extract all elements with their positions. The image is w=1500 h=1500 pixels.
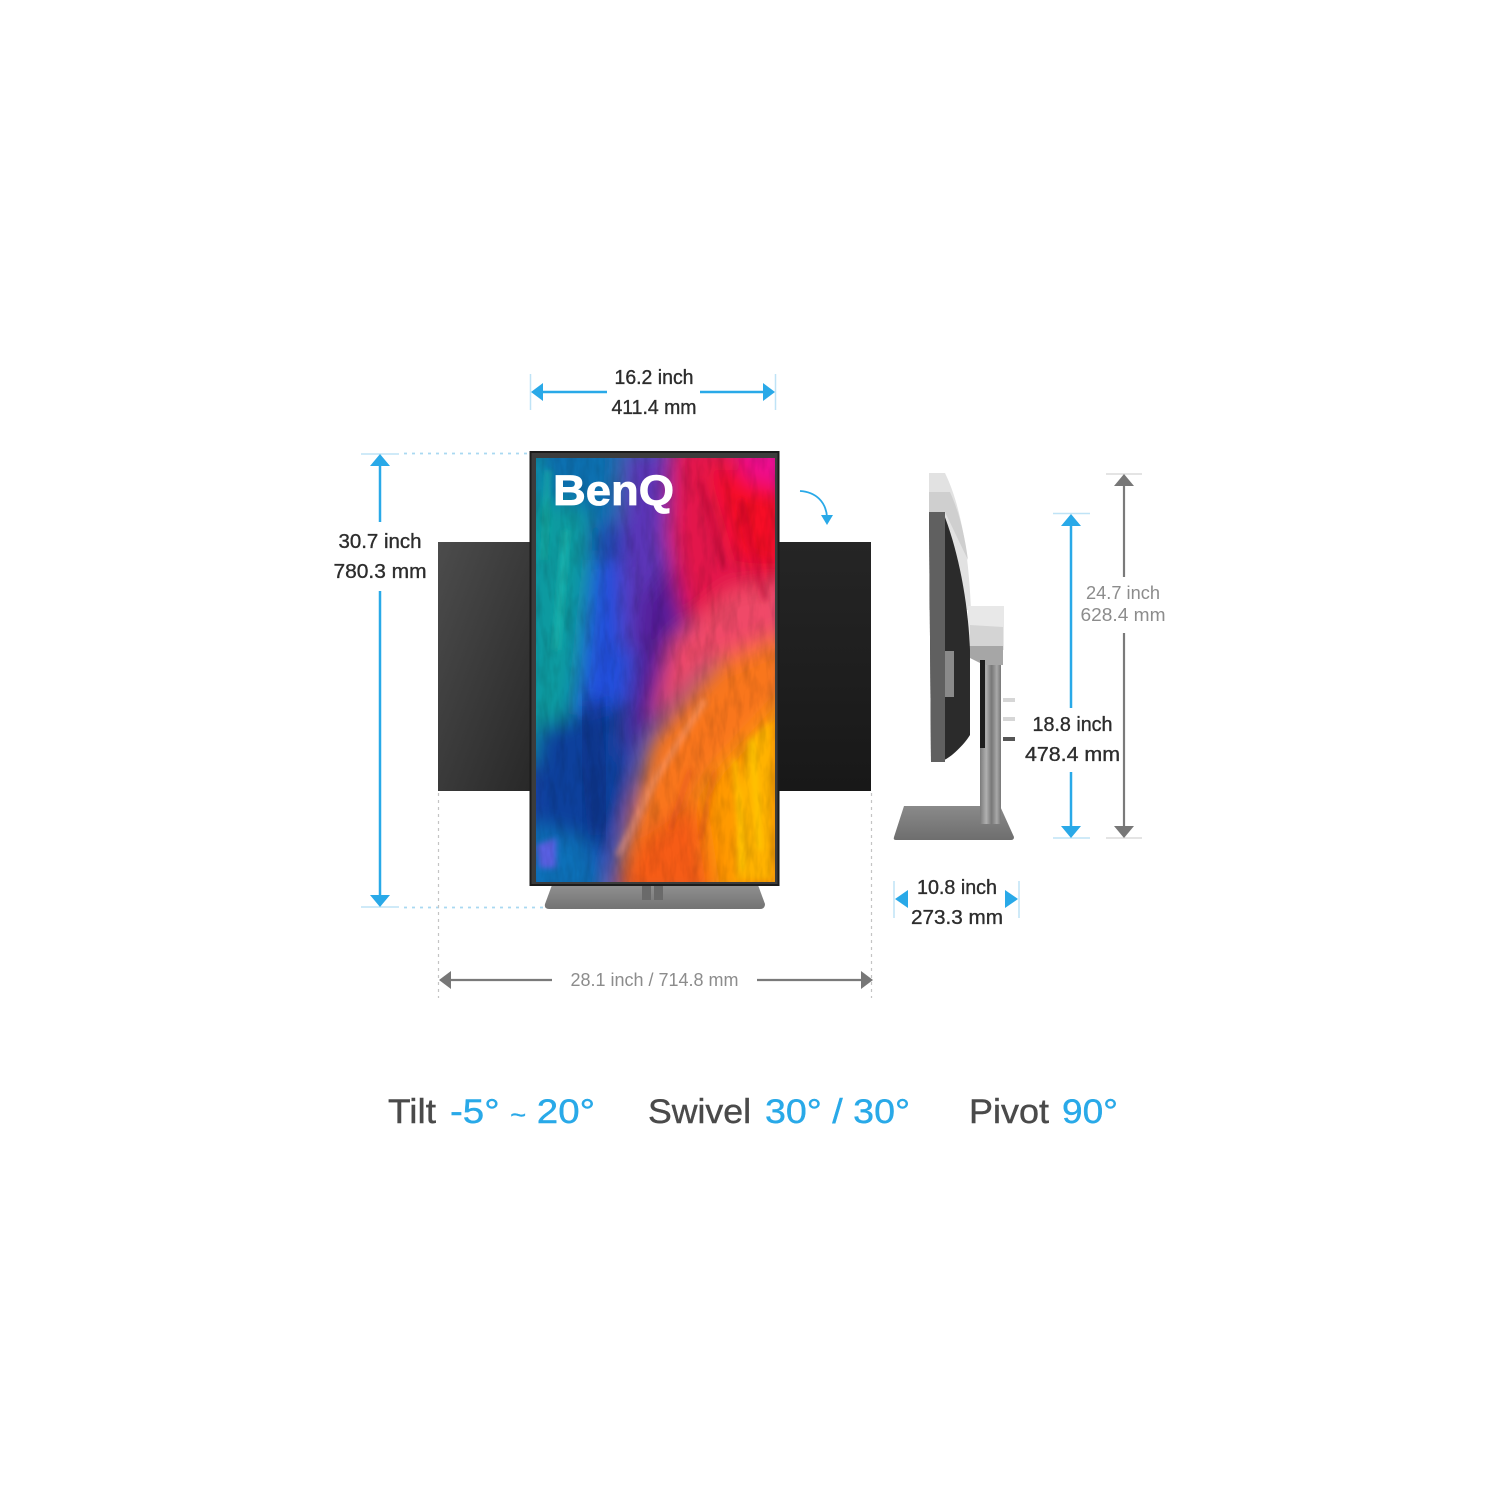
pivot spec: Pivot [969, 1093, 1050, 1131]
port block [945, 651, 954, 697]
dimension: maximum height 24.7 inch: 24.7 inch [1086, 583, 1160, 603]
height clips [1003, 698, 1015, 702]
swivel spec [648, 1093, 910, 1131]
monitor front view with rotated landscape panel behind [438, 440, 871, 909]
dimension: minimum height 18.8 inch: 18.8 inch [1032, 714, 1112, 736]
dimension: maximum height 24.7 inch: 628.4 mm [1080, 605, 1166, 625]
side base [894, 806, 1014, 840]
landscape panel left wing [438, 542, 531, 791]
swivel spec: Swivel [648, 1093, 751, 1131]
stand arm [968, 646, 1003, 665]
swivel spec: 30° / 30° [765, 1093, 910, 1131]
dimension: total height 30.7 inch: 780.3 mm [334, 561, 426, 583]
tilt spec: Tilt [388, 1093, 437, 1131]
stand neck front [642, 885, 663, 900]
stand pole side [980, 648, 1001, 824]
dimension: depth 10.8 inch: 10.8 inch [917, 877, 997, 899]
pivot spec: 90° [1062, 1093, 1118, 1131]
dimension: minimum height 18.8 inch [1025, 514, 1120, 838]
ghost raised stand [968, 606, 1004, 650]
ghost panel mid band [929, 492, 968, 560]
dotted guide lines [404, 454, 545, 908]
monitor screen artwork [536, 458, 775, 882]
dimension: panel width 16.2 inch [530, 367, 776, 419]
dimension: panel width 16.2 inch: 411.4 mm [612, 397, 696, 419]
dimension: depth 10.8 inch [894, 877, 1019, 929]
dimension: minimum height 18.8 inch: 478.4 mm [1025, 744, 1120, 766]
tilt spec [388, 1093, 595, 1131]
rotation arrow [800, 491, 833, 525]
ghost raised stand lower band [970, 625, 1003, 650]
dimension: landscape width 28.1 inch: 28.1 inch / 714.8 mm [570, 970, 738, 990]
dimension: maximum height 24.7 inch [1080, 474, 1166, 838]
pivot spec [969, 1093, 1118, 1131]
BenQ logo: BenQ [553, 467, 674, 515]
dimension: total height 30.7 inch: 30.7 inch [338, 531, 422, 553]
landscape panel right wing [778, 542, 871, 791]
monitor bezel [530, 452, 778, 885]
stand base front [545, 885, 765, 909]
adjustment specs row [388, 1093, 1118, 1131]
ghost raised panel [929, 473, 971, 610]
side panel body [929, 512, 970, 762]
dimension: panel width 16.2 inch: 16.2 inch [614, 367, 694, 389]
dimension: total height 30.7 inch [334, 454, 426, 907]
tilt spec: -5° ~ 20° [450, 1093, 595, 1131]
dimension: depth 10.8 inch: 273.3 mm [911, 907, 1003, 929]
pole foot [980, 780, 1001, 824]
dimension: landscape width 28.1 inch [439, 970, 873, 990]
side panel edge [929, 512, 945, 762]
monitor side view [894, 473, 1015, 840]
soft dark blue shadow [588, 700, 600, 835]
